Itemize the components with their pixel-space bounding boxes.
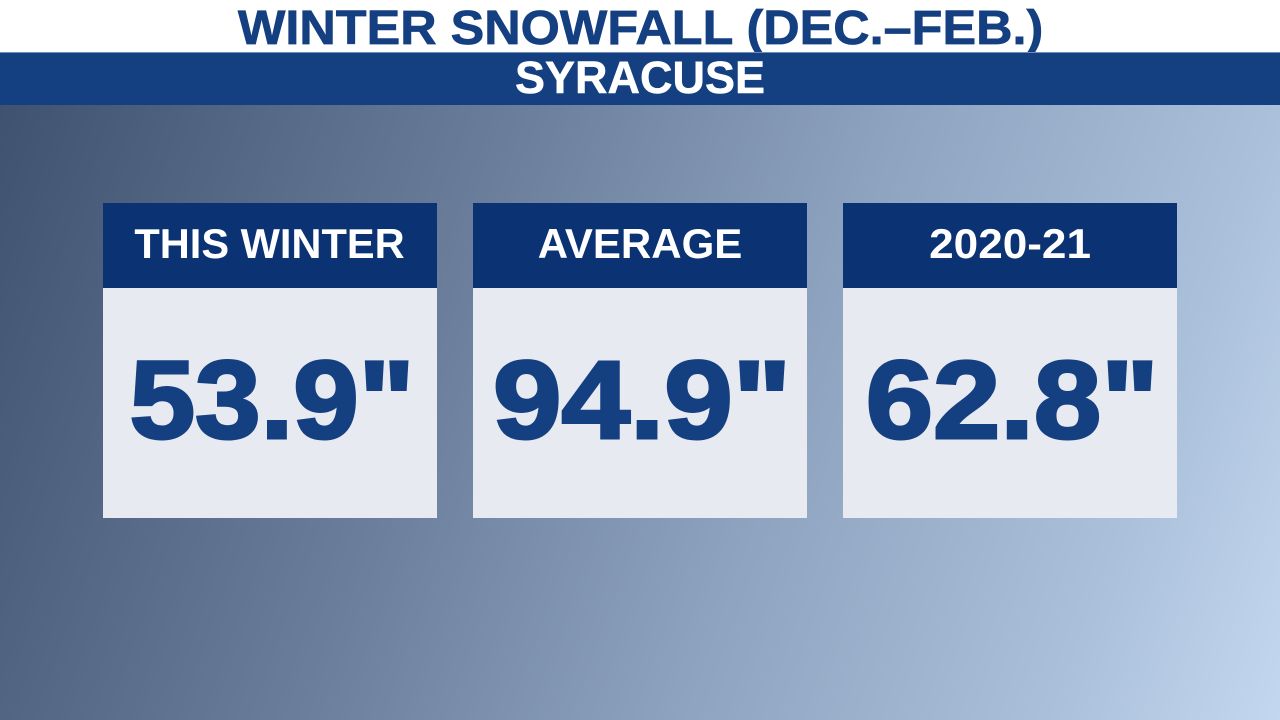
value: this winter snowfall: 53.9": [130, 339, 414, 462]
heading: 2020-21: [843, 203, 1177, 288]
heading: this winter: THIS WINTER: [135, 220, 405, 267]
heading: average: AVERAGE: [538, 220, 742, 267]
value: 2020-21 snowfall: 62.8": [866, 339, 1158, 462]
panel: this winter: [103, 203, 437, 518]
subtitle bar: Syracuse: SYRACUSE: [515, 52, 765, 103]
heading: average: [473, 203, 807, 288]
subtitle bar: Syracuse: [0, 52, 1280, 105]
title: WINTER SNOWFALL (DEC.–FEB.): [238, 2, 1044, 55]
panel: 2020-21: [843, 203, 1177, 518]
panel: average: [473, 203, 807, 518]
value: average snowfall: 94.9": [493, 339, 791, 462]
heading: 2020-21: 2020-21: [929, 220, 1091, 267]
heading: this winter: [103, 203, 437, 288]
